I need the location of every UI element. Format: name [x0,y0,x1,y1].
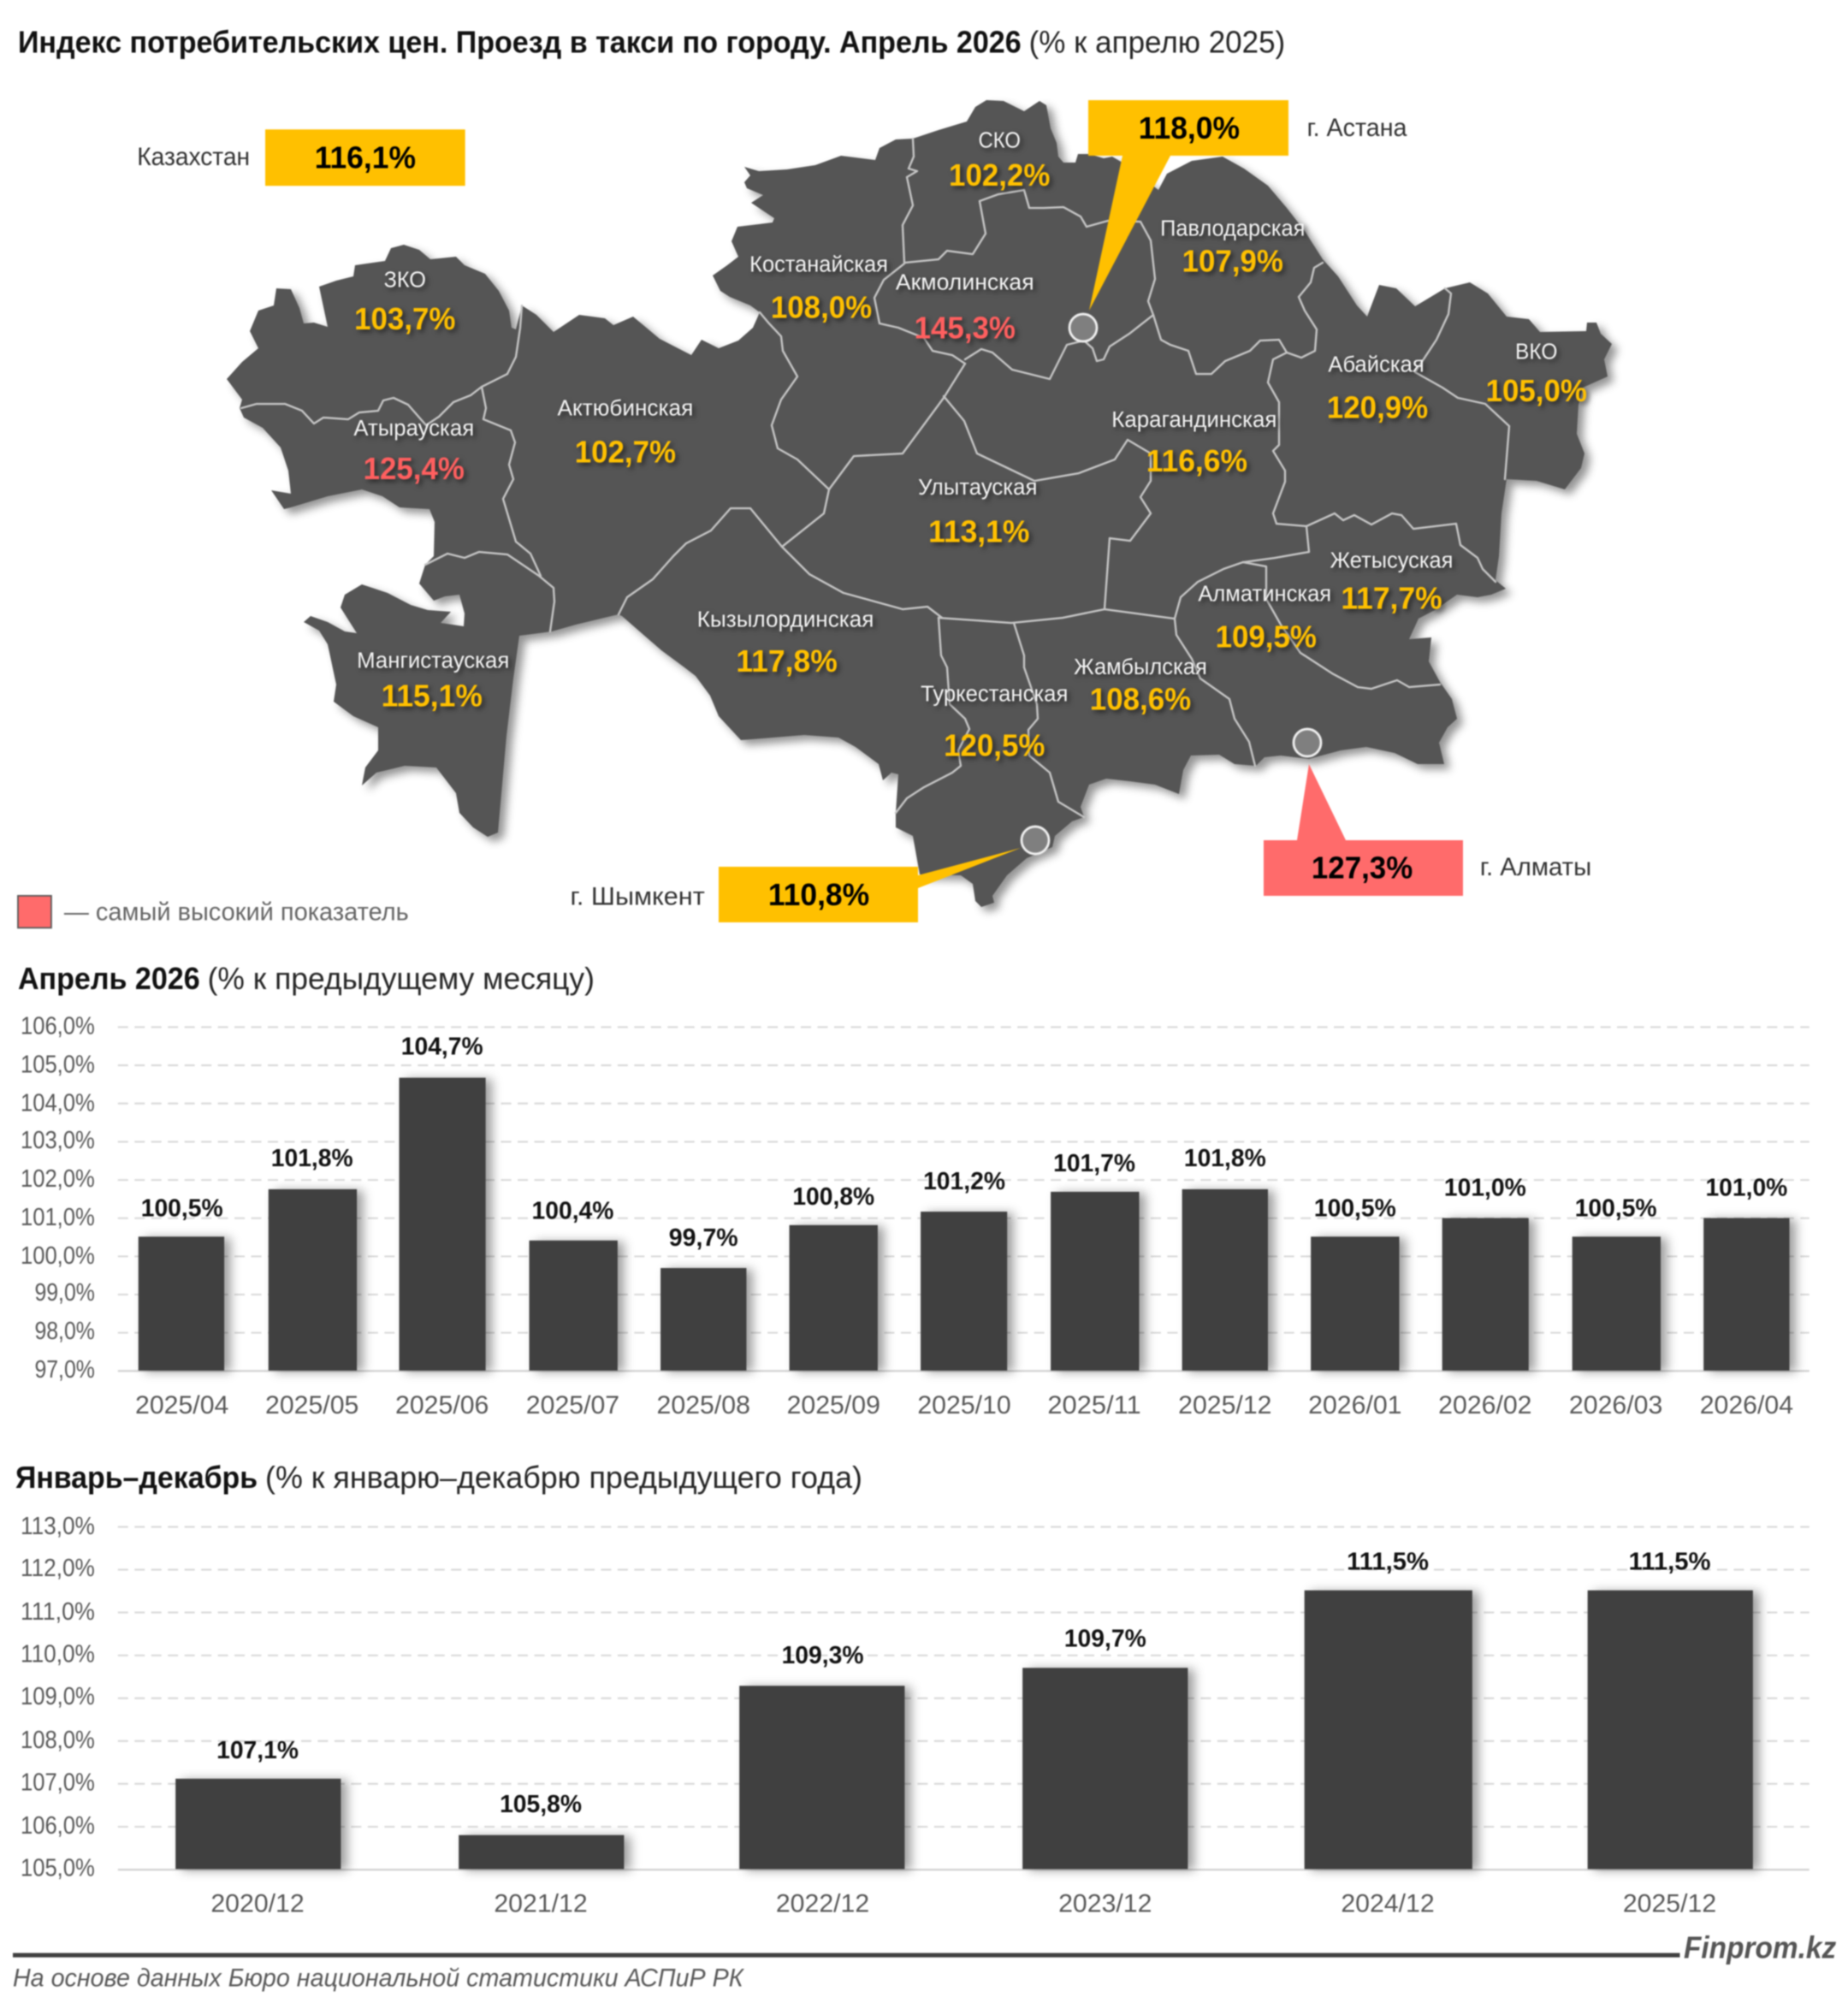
y axis and gridlines: 106,0% [21,1013,95,1040]
bar 2026/01: 100,5% [1314,1194,1396,1222]
y axis and gridlines: 100,0% [21,1242,95,1270]
heading: monthly chart: (% к предыдущему месяцу) [208,961,595,996]
callout: Шымкент: г. Шымкент [570,882,705,910]
bar 2020/12: 107,1% [216,1737,299,1764]
bar 2025/12: 2025/12 [1178,1391,1271,1419]
y axis and gridlines: 110,0% [21,1641,95,1668]
bar 2025/08: 2025/08 [657,1391,750,1419]
Жамбылская: Жамбылская [1074,655,1207,679]
Павлодарская: 107,9% [1182,244,1283,279]
bar 2026/02 [1438,1174,1532,1419]
Улытауская: 113,1% [928,514,1029,549]
Улытауская: Улытауская [918,476,1037,500]
bar 2025/06 [395,1034,489,1419]
Карагандинская: 116,6% [1146,443,1247,478]
Костанайская [749,253,888,324]
city markers [1022,314,1321,854]
Алматинская: 109,5% [1216,619,1317,654]
bar 2025/08: 99,7% [669,1224,738,1252]
y axis and gridlines: 111,0% [21,1598,95,1626]
y axis and gridlines: 112,0% [21,1555,95,1582]
y axis and gridlines: 105,0% [21,1052,95,1079]
y axis and gridlines: 113,0% [21,1513,95,1540]
Туркестанская: Туркестанская [921,682,1068,706]
bar 2025/10 [917,1168,1011,1419]
bar 2021/12: 105,8% [500,1791,582,1818]
bar 2021/12: 2021/12 [494,1890,588,1918]
y axis and gridlines: 103,0% [21,1127,95,1154]
bar 2025/06: 2025/06 [395,1391,489,1419]
bar 2025/12: 101,8% [1184,1145,1266,1172]
bar 2025/11 [1047,1150,1141,1419]
bar 2022/12 [739,1642,904,1918]
y axis and gridlines: 105,0% [21,1855,95,1882]
bar 2025/05: 2025/05 [265,1391,358,1419]
Атырауская [353,417,474,486]
callout: Алматы: 127,3% [1312,850,1413,885]
bar chart: monthly [21,1013,1810,1419]
callout: Казахстан: 116,1% [315,140,416,175]
bar 2026/02: 101,0% [1444,1174,1526,1201]
heading: annual chart: Январь–декабрь [15,1460,258,1495]
Костанайская: Костанайская [749,253,888,277]
Туркестанская: 120,5% [944,728,1045,763]
y axis and gridlines: 107,0% [21,1769,95,1796]
bar 2025/09: 100,8% [792,1183,874,1211]
bar 2025/10: 101,2% [923,1168,1005,1195]
callout: Астана: 118,0% [1139,110,1240,145]
callout: Шымкент [570,848,1021,922]
bar 2025/12: 111,5% [1629,1549,1710,1576]
bar 2023/12: 2023/12 [1058,1890,1152,1918]
Актюбинская [558,396,693,470]
bar 2022/12: 109,3% [782,1642,863,1669]
bar 2025/08 [657,1224,750,1419]
Карагандинская [1111,408,1276,478]
bar 2023/12: 109,7% [1064,1626,1146,1653]
bar 2025/12 [1178,1145,1271,1419]
ВКО: 105,0% [1486,373,1587,408]
bar 2025/07: 2025/07 [526,1391,619,1419]
bar 2026/03: 100,5% [1575,1194,1657,1222]
Абайская [1327,353,1428,424]
region borders [241,139,1509,817]
Костанайская: 108,0% [771,289,872,324]
bar 2025/05: 101,8% [271,1145,353,1172]
bar 2024/12 [1305,1549,1472,1918]
ВКО: ВКО [1515,340,1557,364]
bar 2026/01: 2026/01 [1308,1391,1401,1419]
СКО: 102,2% [949,157,1050,193]
bar 2025/04: 100,5% [141,1194,223,1222]
title: Индекс потребительских цен. Проезд в такси по городу. Апрель 2026 [18,24,1022,59]
bar 2025/04 [135,1194,228,1419]
СКО: СКО [979,128,1021,152]
bar 2025/09: 2025/09 [787,1391,880,1419]
brand: Finprom.kz [1684,1930,1836,1965]
Жетысуская: 117,7% [1341,580,1442,615]
heading: monthly chart [18,961,595,996]
Акмолинская: 145,3% [915,310,1016,345]
marker: Шымкент [1022,827,1049,854]
bar 2024/12: 2024/12 [1341,1890,1435,1918]
Карагандинская: Карагандинская [1111,408,1276,432]
y axis and gridlines: 102,0% [21,1165,95,1193]
bar 2026/04: 101,0% [1705,1174,1787,1201]
callout: Шымкент: 110,8% [768,877,869,912]
Алматинская [1198,582,1331,654]
Мангистауская: 115,1% [382,678,483,713]
Актюбинская: Актюбинская [558,396,693,420]
footer rule [13,1953,1680,1958]
callout: Астана: г. Астана [1307,114,1407,142]
bar 2025/07 [526,1197,619,1419]
bar 2021/12 [459,1791,624,1918]
Абайская: 120,9% [1327,389,1428,424]
heading: annual chart: (% к январю–декабрю предыдущего года) [265,1460,862,1495]
bar 2026/03 [1569,1194,1662,1419]
marker: Астана [1069,314,1097,341]
Кызылординская [697,607,874,679]
bar chart: annual [21,1513,1810,1918]
Павлодарская [1160,217,1305,279]
Атырауская: Атырауская [353,417,474,441]
bar 2025/04: 2025/04 [135,1391,228,1419]
bar 2026/03: 2026/03 [1569,1391,1662,1419]
ЗКО: ЗКО [384,269,426,293]
Мангистауская: Мангистауская [357,649,509,673]
bar 2025/12: 2025/12 [1623,1890,1716,1918]
bar 2025/12 [1588,1549,1753,1918]
Абайская: Абайская [1328,353,1424,376]
Жамбылская: 108,6% [1090,682,1191,717]
title: (% к апрелю 2025) [1029,24,1285,59]
y axis and gridlines [21,1513,1810,1882]
callout: Казахстан [137,129,465,186]
y axis and gridlines: 104,0% [21,1090,95,1117]
y axis and gridlines: 101,0% [21,1204,95,1231]
bar 2025/10: 2025/10 [917,1391,1011,1419]
y axis and gridlines: 106,0% [21,1812,95,1840]
Улытауская [918,476,1037,549]
Жетысуская [1330,549,1453,615]
map silhouette [227,100,1612,907]
Алматинская: Алматинская [1198,582,1331,606]
y axis and gridlines: 97,0% [34,1356,95,1384]
callout: Казахстан: Казахстан [137,143,250,171]
Акмолинская: Акмолинская [896,271,1034,295]
bar 2025/05 [265,1145,358,1419]
y axis and gridlines: 98,0% [34,1318,95,1345]
region labels [353,128,1587,763]
source note: На основе данных Бюро национальной статистики АСПиР РК [13,1964,745,1992]
Кызылординская: Кызылординская [697,607,874,631]
y axis and gridlines: 108,0% [21,1727,95,1754]
СКО [949,128,1050,193]
bar 2026/01 [1308,1194,1401,1419]
Жетысуская: Жетысуская [1330,549,1453,573]
bar 2026/04: 2026/04 [1700,1391,1793,1419]
callout: Алматы [1264,764,1591,896]
heading: monthly chart: Апрель 2026 [18,961,200,996]
Акмолинская [896,271,1034,345]
legend: — самый высокий показатель [64,898,409,926]
Жамбылская [1074,655,1207,717]
bar 2025/09 [787,1183,880,1419]
y axis and gridlines: 99,0% [34,1279,95,1307]
bar 2025/11: 2025/11 [1047,1391,1141,1419]
Павлодарская: Павлодарская [1160,217,1305,241]
bar 2022/12: 2022/12 [776,1890,869,1918]
bar 2020/12 [175,1737,341,1918]
bar 2025/07: 100,4% [532,1197,613,1224]
Туркестанская [921,682,1068,763]
callout: Астана [1088,100,1407,311]
bar 2025/11: 101,7% [1053,1150,1135,1177]
y axis and gridlines: 109,0% [21,1683,95,1710]
marker: Алматы [1294,729,1321,756]
bar 2020/12: 2020/12 [210,1890,305,1918]
Атырауская: 125,4% [364,451,465,486]
callout: Алматы: г. Алматы [1480,853,1591,881]
ЗКО: 103,7% [354,301,455,336]
bar 2025/06: 104,7% [401,1034,483,1061]
bar 2026/02: 2026/02 [1438,1391,1532,1419]
map of Kazakhstan [227,100,1612,907]
y axis and gridlines [21,1013,1810,1384]
Мангистауская [357,649,509,713]
ЗКО [354,269,455,336]
ВКО [1486,340,1587,408]
bar 2024/12: 111,5% [1347,1549,1429,1576]
Актюбинская: 102,7% [575,435,676,470]
bar 2023/12 [1022,1626,1188,1918]
bar 2026/04 [1700,1174,1793,1419]
Кызылординская: 117,8% [736,643,838,679]
